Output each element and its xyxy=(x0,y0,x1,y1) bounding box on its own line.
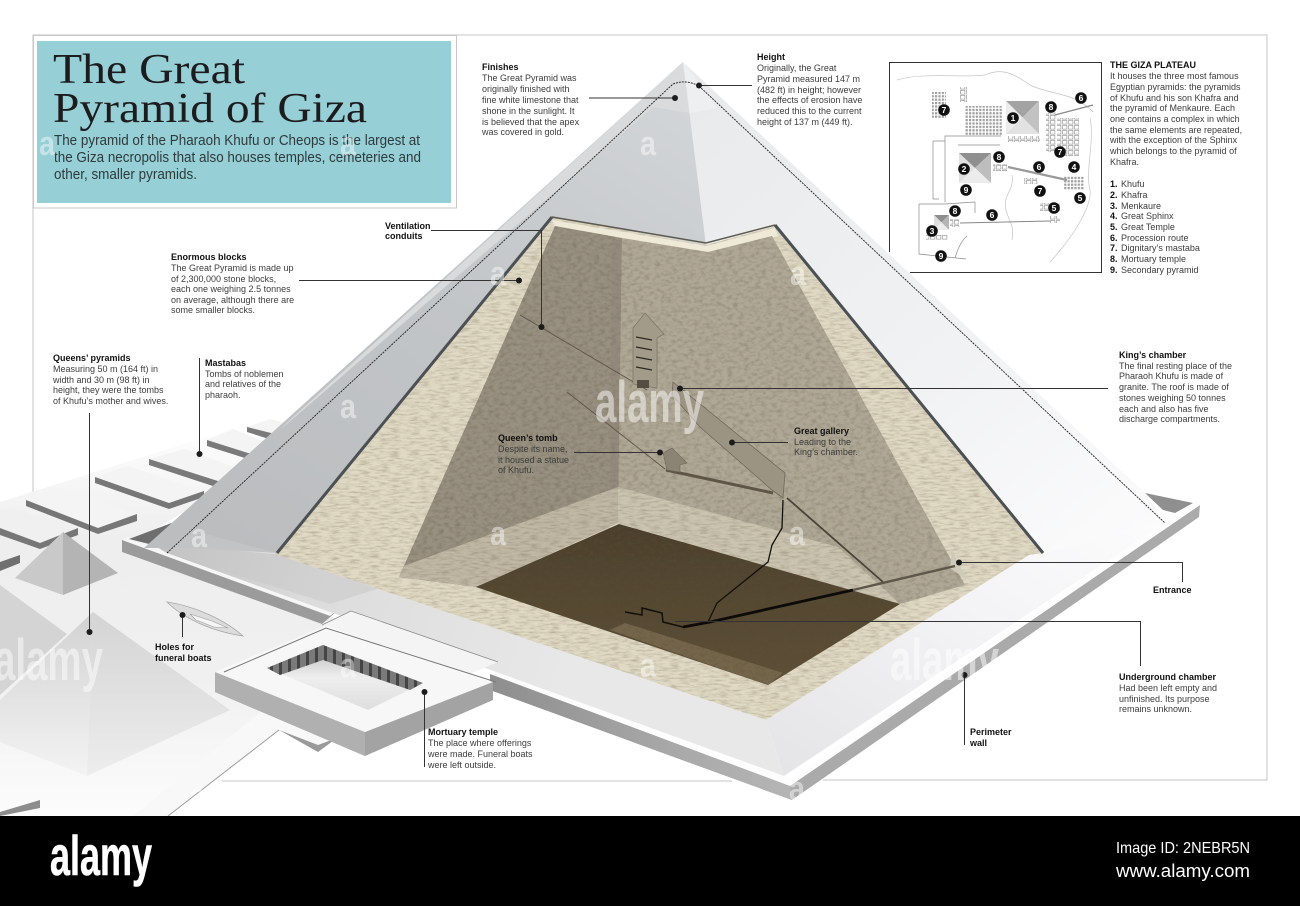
apex cap, left xyxy=(653,62,690,113)
footer bar xyxy=(0,816,1300,906)
text: mortuary temple: The place where offerings xyxy=(428,738,532,748)
map number markers: 8 xyxy=(1049,102,1054,112)
text: ventilation conduits: conduits xyxy=(385,231,422,241)
map number markers: 9 xyxy=(939,251,944,261)
text: enormous blocks: of 2,300,000 stone blocks, xyxy=(171,274,276,284)
watermarks: alamy xyxy=(595,370,704,435)
text: enormous blocks: Enormous blocks xyxy=(171,252,247,262)
map legend: 9. xyxy=(1110,265,1118,275)
cavity right wall xyxy=(618,236,965,604)
text: queens' pyramids: of Khufu’s mother and wives. xyxy=(53,396,168,406)
watermarks: a xyxy=(640,125,657,163)
text: Giza plateau description: the same elements are repeated, xyxy=(1110,125,1242,135)
text: height: (482 ft) in height; however xyxy=(757,85,861,95)
heading: The Great xyxy=(53,47,245,93)
map legend: Khufu xyxy=(1121,179,1145,189)
text: height: Pyramid measured 147 m xyxy=(757,74,860,84)
text: Giza plateau description: Egyptian pyramids: the pyramids xyxy=(1110,82,1241,92)
right pyramid face xyxy=(683,62,1165,553)
footer image id: Image ID: 2NEBR5N xyxy=(1116,840,1250,857)
map number markers: 7 xyxy=(1058,147,1063,157)
text: height: Originally, the Great xyxy=(757,63,837,73)
left pyramid face xyxy=(144,62,706,553)
map number markers: 2 xyxy=(962,164,967,174)
map legend: Khafra xyxy=(1121,190,1148,200)
text: great gallery: King’s chamber. xyxy=(794,447,858,457)
map number markers: 1 xyxy=(1011,113,1016,123)
text: holes for funeral boats: funeral boats xyxy=(155,653,212,663)
map number markers: 7 xyxy=(1038,186,1043,196)
text: entrance: Entrance xyxy=(1153,585,1192,595)
outer frame lines xyxy=(33,35,1267,781)
text: queens' pyramids: Queens’ pyramids xyxy=(53,353,131,363)
text: great gallery: Leading to the xyxy=(794,437,851,447)
floor step xyxy=(610,623,783,685)
map number markers: 6 xyxy=(990,210,995,220)
courtyard xyxy=(267,645,423,710)
inner cavity top band xyxy=(552,220,778,253)
text: finishes: is believed that the apex xyxy=(482,117,580,127)
text: underground chamber: Underground chamber xyxy=(1119,672,1217,682)
text: finishes: originally finished with xyxy=(482,84,570,94)
intro text: the Giza necropolis that also houses temples, cemeteries and xyxy=(54,150,421,166)
dark cut edges xyxy=(277,217,552,553)
casing base, right xyxy=(766,523,1165,776)
map number markers: 8 xyxy=(997,152,1002,162)
height dashed outline xyxy=(167,82,1165,553)
cavity left wall xyxy=(399,226,622,587)
leader: funeral boats xyxy=(180,612,186,637)
text: enormous blocks: some smaller blocks. xyxy=(171,305,255,315)
map legend: Menkaure xyxy=(1121,201,1161,211)
watermarks: a xyxy=(490,255,507,293)
map number markers: 3 xyxy=(930,226,935,236)
text: Giza plateau description: with the exception of the Sphinx xyxy=(1109,135,1238,145)
leader: great gallery xyxy=(729,440,788,446)
text: Giza plateau description: the pyramid of Menkaure. Each xyxy=(1110,103,1235,113)
text: king's chamber: each and also has five xyxy=(1119,404,1209,414)
watermarks: a xyxy=(191,517,208,555)
map legend: Great Temple xyxy=(1121,222,1175,232)
map legend: 5. xyxy=(1110,222,1118,232)
leader: finishes xyxy=(589,95,678,101)
queen's corridor xyxy=(666,470,773,493)
watermarks: a xyxy=(39,125,56,163)
map number markers: 7 xyxy=(942,105,947,115)
map frame xyxy=(890,62,1102,272)
title panel xyxy=(34,36,456,208)
temple rooftop xyxy=(215,627,493,732)
map legend: 7. xyxy=(1110,243,1118,253)
ascending passage xyxy=(787,498,883,582)
text: king's chamber: stones weighing 50 tonnes xyxy=(1119,393,1226,403)
leader: mastabas xyxy=(196,358,202,457)
funeral boat hole xyxy=(167,602,243,636)
procession routes xyxy=(960,105,1093,223)
watermarks: a xyxy=(340,647,357,685)
watermarks: a xyxy=(789,770,806,808)
text: enormous blocks: each one weighing 2.5 tonnes xyxy=(171,284,291,294)
text: Giza plateau description: of Khufu and his son Khafra and xyxy=(1110,93,1239,103)
map legend: 1. xyxy=(1110,179,1118,189)
text: holes for funeral boats: Holes for xyxy=(155,642,195,652)
text: finishes: The Great Pyramid was xyxy=(482,73,577,83)
mastaba clusters xyxy=(926,87,1084,240)
well shaft xyxy=(708,500,783,622)
text: ventilation conduits: Ventilation xyxy=(385,221,431,231)
text: queens' pyramids: Measuring 50 m (164 ft) in xyxy=(53,364,158,374)
text: queen's tomb: Queen’s tomb xyxy=(498,433,558,443)
text: underground chamber: Had been left empty and xyxy=(1119,683,1217,693)
watermarks: a xyxy=(340,388,357,426)
leader: underground chamber xyxy=(675,622,1140,666)
watermarks: a xyxy=(340,125,357,163)
sand-coloured core xyxy=(275,217,1043,720)
leader: queens' pyramids xyxy=(86,413,92,635)
text: Giza plateau description: Khafra. xyxy=(1110,157,1139,167)
queen's chamber xyxy=(663,448,687,472)
text: underground chamber: unfinished. Its purpose xyxy=(1119,694,1210,704)
leader: ventilation conduits xyxy=(431,230,544,330)
text: height: Height xyxy=(757,52,785,62)
large queen pyramid xyxy=(0,612,230,776)
text: finishes: Finishes xyxy=(482,62,519,72)
watermarks: a xyxy=(790,255,807,293)
leader: perimeter wall xyxy=(962,672,968,745)
pyramid behind, left edge xyxy=(0,585,67,695)
intro text: other, smaller pyramids. xyxy=(54,167,197,183)
text: height: reduced this to the current xyxy=(757,106,862,116)
apex cap, right xyxy=(683,62,717,113)
footer url: www.alamy.com xyxy=(1115,861,1250,881)
map number markers: 6 xyxy=(1037,162,1042,172)
main pyramid and perimeter wall xyxy=(122,62,1200,800)
watermarks: a xyxy=(789,515,806,553)
plateau with mastabas and queens' pyramids xyxy=(0,412,340,816)
text: great gallery: Great gallery xyxy=(794,426,849,436)
watermarks: a xyxy=(190,777,207,815)
map contours and walls xyxy=(897,72,1093,262)
text: mastabas: Tombs of noblemen xyxy=(205,369,284,379)
lower stone bands xyxy=(618,487,900,604)
heading line two: Pyramid of Giza xyxy=(53,86,367,132)
map legend: 4. xyxy=(1110,211,1118,221)
text: king's chamber: Pharaoh Khufu is made of xyxy=(1119,371,1224,381)
temple side walls xyxy=(215,672,493,756)
leader: height xyxy=(696,82,752,88)
mortuary temple and causeway xyxy=(133,611,498,816)
king's chamber stack xyxy=(633,313,664,388)
text: queen's tomb: it housed a statue xyxy=(498,455,569,465)
map number markers: 4 xyxy=(1072,162,1077,172)
thin conduits xyxy=(520,315,665,469)
text: finishes: fine white limestone that xyxy=(482,95,579,105)
text: mortuary temple: were made. Funeral boats xyxy=(427,749,533,759)
text: king's chamber: King’s chamber xyxy=(1119,350,1187,360)
text: Giza plateau description: THE GIZA PLATEAU xyxy=(1110,60,1196,70)
intro text: The pyramid of the Pharaoh Khufu or Cheops is the largest at xyxy=(54,133,420,149)
map legend: 8. xyxy=(1110,254,1118,264)
perimeter wall front xyxy=(488,500,1200,800)
watermarks: alamy xyxy=(890,628,999,693)
text: king's chamber: The final resting place of the xyxy=(1119,361,1232,371)
lower-left wall fragment xyxy=(0,800,40,816)
text: king's chamber: discharge compartments. xyxy=(1119,414,1220,424)
wedges inside perimeter wall xyxy=(129,518,185,545)
entrance notch xyxy=(950,550,967,580)
small queen pyramid xyxy=(15,532,118,595)
causeway xyxy=(133,710,337,816)
map legend: Great Sphinx xyxy=(1121,211,1174,221)
watermarks xyxy=(0,125,999,815)
map number markers: 5 xyxy=(1052,203,1057,213)
text: mastabas: Mastabas xyxy=(205,358,246,368)
map legend: Dignitary’s mastaba xyxy=(1121,243,1200,253)
text: queens' pyramids: width and 30 m (98 ft) in xyxy=(52,375,150,385)
map legend: 6. xyxy=(1110,233,1118,243)
text: enormous blocks: The Great Pyramid is made up xyxy=(171,263,294,273)
text: Giza plateau description: one contains a complex in which xyxy=(1110,114,1240,124)
map legend: 2. xyxy=(1110,190,1118,200)
watermarks: a xyxy=(490,515,507,553)
perimeter wall left side xyxy=(122,537,336,624)
grand gallery xyxy=(672,382,785,498)
text: mastabas: pharaoh. xyxy=(205,390,241,400)
map legend: Mortuary temple xyxy=(1121,254,1186,264)
text: underground chamber: remains unknown. xyxy=(1119,704,1192,714)
underground floor xyxy=(476,524,900,685)
text: finishes: was covered in gold. xyxy=(481,127,564,137)
leader: mortuary temple xyxy=(422,689,428,767)
soft blend from left face to base xyxy=(167,530,380,604)
text: queen's tomb: of Khufu. xyxy=(498,465,534,475)
leader: king's chamber xyxy=(677,386,1108,392)
map legend: Secondary pyramid xyxy=(1121,265,1199,275)
casing base, left xyxy=(150,543,784,776)
light outer strip on left face xyxy=(280,62,683,430)
text: queens' pyramids: height, they were the tombs xyxy=(53,385,164,395)
text: Giza plateau description: which belongs to the pyramid of xyxy=(1109,146,1237,156)
descending passage xyxy=(625,566,955,627)
text: height: the effects of erosion have xyxy=(757,95,862,105)
panel: Giza plateau map xyxy=(890,62,1102,272)
text: mastabas: and relatives of the xyxy=(205,379,281,389)
text: enormous blocks: on average, although there are xyxy=(171,295,294,305)
footer logo: alamy xyxy=(50,824,152,887)
leader: entrance xyxy=(956,560,1182,582)
map pyramids xyxy=(934,101,1039,230)
map number markers: 6 xyxy=(1079,93,1084,103)
leader: enormous blocks xyxy=(299,278,522,284)
map number markers: 5 xyxy=(1078,193,1083,203)
map number markers xyxy=(926,92,1087,262)
text: queen's tomb: Despite its name, xyxy=(498,444,568,454)
leader: queen's tomb xyxy=(574,450,663,456)
wall corner shading xyxy=(610,240,622,490)
mastaba row xyxy=(0,419,290,571)
watermarks: a xyxy=(640,647,657,685)
map legend: 3. xyxy=(1110,201,1118,211)
text: finishes: shone in the sunlight. It xyxy=(482,106,575,116)
text: perimeter wall: Perimeter xyxy=(970,727,1012,737)
map number markers: 9 xyxy=(964,185,969,195)
text: mortuary temple: Mortuary temple xyxy=(428,727,498,737)
text: Giza plateau description: It houses the three most famous xyxy=(1110,71,1239,81)
text: height: height of 137 m (449 ft). xyxy=(757,117,853,127)
text: king's chamber: granite. The roof is made of xyxy=(1119,382,1229,392)
text: perimeter wall: wall xyxy=(969,738,987,748)
map legend: Procession route xyxy=(1121,233,1189,243)
map number markers: 8 xyxy=(953,206,958,216)
rear annex xyxy=(224,611,498,682)
text: mortuary temple: were left outside. xyxy=(427,760,496,770)
